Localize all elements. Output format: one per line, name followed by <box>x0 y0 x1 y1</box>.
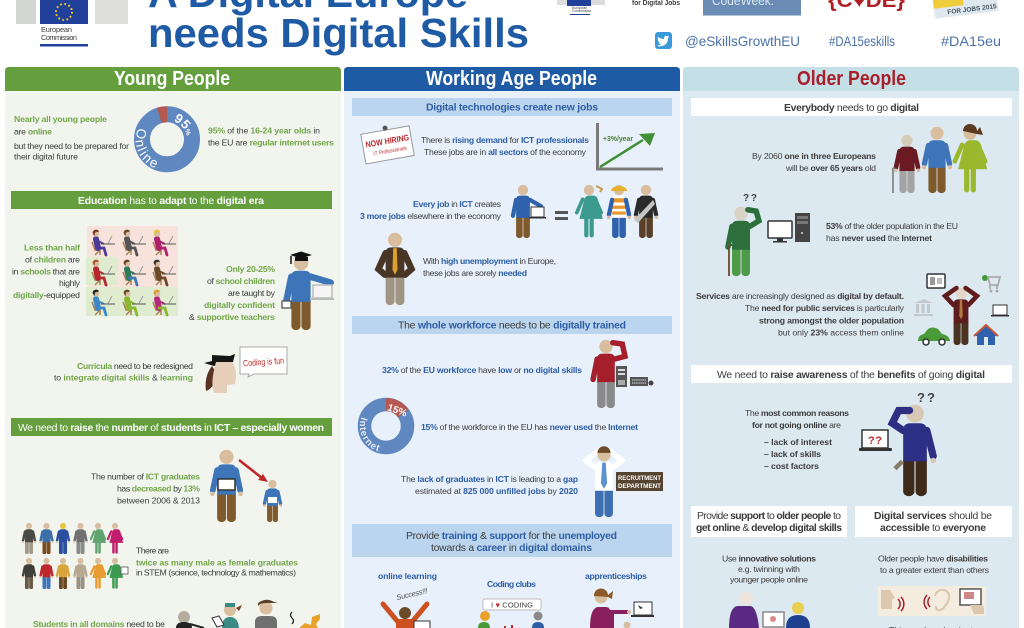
text: innovative solutions: e.g. twinning with <box>738 564 800 574</box>
text: innovative solutions: younger people online <box>730 574 808 584</box>
figures: three other jobs <box>577 185 658 238</box>
partner logos: Commission <box>572 9 591 13</box>
speech bubble: coding is fun: Coding is fun <box>243 356 284 368</box>
icons: digital services <box>914 274 1009 345</box>
banner: training and support: towards a career in digital domains <box>431 543 592 554</box>
panel: young people <box>5 67 341 628</box>
stat: 95% regular internet users: 95% of the 16-24 year olds in <box>208 126 320 136</box>
box: provide support: Provide support to older people to <box>697 511 841 522</box>
donut chart: 15% never used internet <box>358 398 414 454</box>
text: ICT graduates: has decreased by 13% <box>117 484 200 494</box>
figures: three generations <box>893 124 987 193</box>
header logo: European Commission: Commission <box>41 33 77 42</box>
column: online learning <box>378 571 437 628</box>
text: every job in ICT: 3 more jobs elsewhere in the economy <box>360 211 502 221</box>
stat: 95% regular internet users <box>208 126 334 148</box>
banner: digital technologies <box>352 98 672 116</box>
text: only 20-25%: Only 20-25% <box>226 264 275 274</box>
text: less than half: highly <box>59 278 81 288</box>
question marks: ?? <box>917 390 935 405</box>
older people header: Older People <box>797 68 906 90</box>
text: every job in ICT: Every job in ICT creates <box>413 199 502 209</box>
banner: digital technologies: Digital technologies create new jobs <box>426 102 598 114</box>
intro text: Nearly all young people <box>14 114 107 124</box>
text: 32% of workforce: 32% of the EU workforce have low or no digital skills <box>382 365 582 375</box>
text: less than half: Less than half <box>24 242 80 252</box>
text: high unemployment <box>423 256 556 278</box>
text: common reasons: The most common reasons <box>745 408 849 418</box>
pictogram: male and female graduates <box>22 523 128 589</box>
social hashtags: #DA15eskills <box>829 33 895 49</box>
sign: recruitment department <box>616 472 663 491</box>
social hashtags: @eSkillsGrowthEU <box>685 33 800 49</box>
column: apprenticeships: apprenticeships <box>585 571 647 581</box>
column: online learning: online learning <box>378 571 437 581</box>
box: provide support <box>691 506 847 537</box>
box: accessible services: Digital services should be <box>874 511 992 522</box>
social hashtags <box>685 33 1001 49</box>
text: services digital by default <box>696 291 905 338</box>
text: twice as many male <box>136 546 298 578</box>
chart: +3% per year: +3%/year <box>603 134 633 143</box>
text: less than half: of children are <box>25 254 80 264</box>
text: innovative solutions: Use innovative solutions <box>722 554 816 564</box>
text: 2060 <box>752 151 876 173</box>
text: common reasons: – lack of interest <box>764 437 832 447</box>
column: apprenticeships <box>585 571 654 628</box>
banner: everybody <box>691 98 1012 116</box>
figure: confused worker <box>593 340 654 408</box>
text: lack of graduates: The lack of graduates in ICT is leading to a gap <box>401 474 578 484</box>
chart: +3% per year <box>598 123 663 169</box>
working age header <box>344 67 680 91</box>
text: 53% <box>826 221 958 243</box>
text: twice as many male: twice as many male as female graduates <box>136 558 298 568</box>
header logo: European Commission: European <box>41 25 72 34</box>
text: only 20-25%: of school children <box>207 276 275 286</box>
banner: everybody: Everybody needs to go digital <box>784 103 919 114</box>
text: rising demand: These jobs are in all sectors of the economy <box>424 147 587 157</box>
text: high unemployment: these jobs are sorely needed <box>423 268 527 278</box>
intro text <box>14 114 129 162</box>
text: services digital by default: Services are increasingly designed as digital by default. <box>696 291 904 301</box>
text: curricula: Curricula need to be redesigned <box>77 361 193 371</box>
text: 53%: has never used the Internet <box>826 233 932 243</box>
figure: old woman with cane <box>728 207 759 276</box>
figure: ICT worker with laptop <box>513 185 546 238</box>
sign: recruitment department: RECRUITMENT <box>618 476 661 482</box>
column: coding clubs: Coding clubs <box>487 579 536 589</box>
text: only 20-25%: are taught by <box>228 288 276 298</box>
working age header: Working Age People <box>426 68 597 90</box>
text: less than half: in schools that are <box>12 266 80 276</box>
figures: professions row <box>176 600 320 628</box>
donut chart: 95% online: Online <box>136 129 157 168</box>
text: rising demand <box>421 135 589 157</box>
banner: raise awareness: We need to raise awareness of the benefits of going digital <box>717 370 985 381</box>
text: common reasons <box>745 408 849 471</box>
text: disabilities: to a greater extent than others <box>880 565 990 575</box>
arrow: decrease <box>239 460 262 478</box>
icon: desktop computer <box>768 213 810 242</box>
intro text: but they need to be prepared for <box>14 141 129 151</box>
text: 2060: By 2060 one in three Europeans <box>752 151 876 161</box>
figure: recruiter <box>586 446 622 517</box>
banner: education <box>11 191 332 209</box>
banner: training and support: Provide training & support for the unemployed <box>406 531 617 542</box>
stat: 95% regular internet users: the EU are regular internet users <box>208 138 334 148</box>
figure: overwhelmed man <box>945 288 977 345</box>
intro text: are online <box>14 126 52 136</box>
text: twice as many male: There are <box>136 546 169 556</box>
young people header: Young People <box>114 68 230 90</box>
donut chart: 15% never used internet: Internet <box>360 418 380 452</box>
sign: recruitment department: DEPARTMENT <box>618 484 661 490</box>
equals sign <box>555 211 568 220</box>
panel: working age people <box>344 67 680 628</box>
text: only 20-25%: digitally confident <box>204 300 275 310</box>
social hashtags: #DA15eu <box>941 33 1001 49</box>
speech bubble: coding is fun <box>240 347 287 377</box>
question marks: ?? <box>743 193 757 204</box>
figure: small graduate <box>263 480 282 522</box>
text: less than half <box>12 242 81 300</box>
figure: confused older man <box>892 405 936 496</box>
text: only 20-25%: & supportive teachers <box>189 312 275 322</box>
text: 53%: 53% of the older population in the EU <box>826 221 958 231</box>
banner: education: Education has to adapt to the digital era <box>78 196 264 207</box>
arrow head <box>258 474 268 482</box>
text: rising demand: There is rising demand for ICT professionals <box>421 135 589 145</box>
banner: whole workforce: The whole workforce needs to be digitally trained <box>398 320 626 332</box>
title: needs Digital Skills <box>148 10 529 56</box>
text: high unemployment: With high unemployment in Europe, <box>423 256 556 266</box>
text: ICT graduates: between 2006 & 2013 <box>117 496 200 506</box>
donut chart: 95% online <box>134 106 200 172</box>
text: curricula <box>54 361 193 382</box>
text: every job in ICT <box>360 199 502 221</box>
intro text: their digital future <box>14 152 78 162</box>
text: innovative solutions <box>722 554 816 584</box>
text: lack of graduates: estimated at 825 000 unfilled jobs by 2020 <box>415 486 578 496</box>
icon: laptop with question marks: ?? <box>868 435 882 447</box>
text: less than half: digitally-equipped <box>13 290 80 300</box>
partner logos <box>557 0 999 19</box>
text: services digital by default: The need for public services is particularly <box>745 303 905 313</box>
young people header <box>5 67 341 91</box>
text: 15% never used internet: 15% of the workforce in the EU has never used the Internet <box>421 422 638 432</box>
text: common reasons: – lack of skills <box>764 449 821 459</box>
older people header <box>683 67 1019 91</box>
text: disabilities: Older people have disabilities <box>878 554 988 564</box>
text: ICT graduates <box>91 472 200 506</box>
banner: training and support <box>352 524 672 557</box>
figure: unemployed man <box>378 233 412 305</box>
partner logos: European <box>572 6 587 10</box>
sign: now hiring: NOW HIRING <box>365 132 410 150</box>
text: common reasons: for not going online are <box>752 420 841 430</box>
banner: students in ICT <box>11 418 332 436</box>
pictogram: classroom grid <box>86 226 178 316</box>
column: coding clubs <box>478 579 544 628</box>
box: accessible services <box>855 506 1012 537</box>
column: online learning: Success!!! <box>395 586 430 602</box>
banner: raise awareness <box>691 365 1012 383</box>
banner: whole workforce <box>352 316 672 334</box>
figure: big graduate <box>210 450 243 522</box>
text: lack of graduates <box>401 474 578 496</box>
box: provide support: get online & develop digital skills <box>696 523 842 534</box>
partner logos: FOR JOBS 2015 <box>947 3 997 16</box>
column: coding clubs: I ♥ CODING <box>491 600 533 610</box>
donut chart: 15% never used internet: 15% <box>386 402 408 420</box>
text: twice as many male: in STEM (science, technology & mathematics) <box>136 568 296 578</box>
text: disabilities <box>878 554 990 575</box>
donut chart: 95% online: 95% <box>174 114 191 136</box>
figure: twinning older and younger <box>729 591 810 628</box>
text: common reasons: – cost factors <box>764 461 819 471</box>
icon: twitter <box>655 32 672 49</box>
text: services digital by default: but only 23% access them online <box>778 328 904 338</box>
icons: disabilities box <box>878 586 986 616</box>
icon: laptop with question marks <box>859 430 892 451</box>
text: only 20-25% <box>189 264 276 322</box>
text: ICT graduates: The number of ICT graduates <box>91 472 200 482</box>
sign: now hiring: IT Professionals <box>373 146 408 157</box>
text: curricula: to integrate digital skills & learning <box>54 372 193 382</box>
banner: students in ICT: We need to raise the number of students in ICT – especially women <box>18 423 324 434</box>
header logo: European Commission <box>16 0 128 46</box>
figure: teacher with laptop <box>282 252 334 330</box>
box: accessible services: accessible to everyone <box>880 523 986 534</box>
sign: now hiring <box>360 121 414 164</box>
text: 2060: will be over 65 years old <box>785 163 876 173</box>
panel: older people <box>683 67 1019 628</box>
figure: student with cap <box>204 354 236 393</box>
text: services digital by default: strong amongst the older population <box>759 316 904 326</box>
